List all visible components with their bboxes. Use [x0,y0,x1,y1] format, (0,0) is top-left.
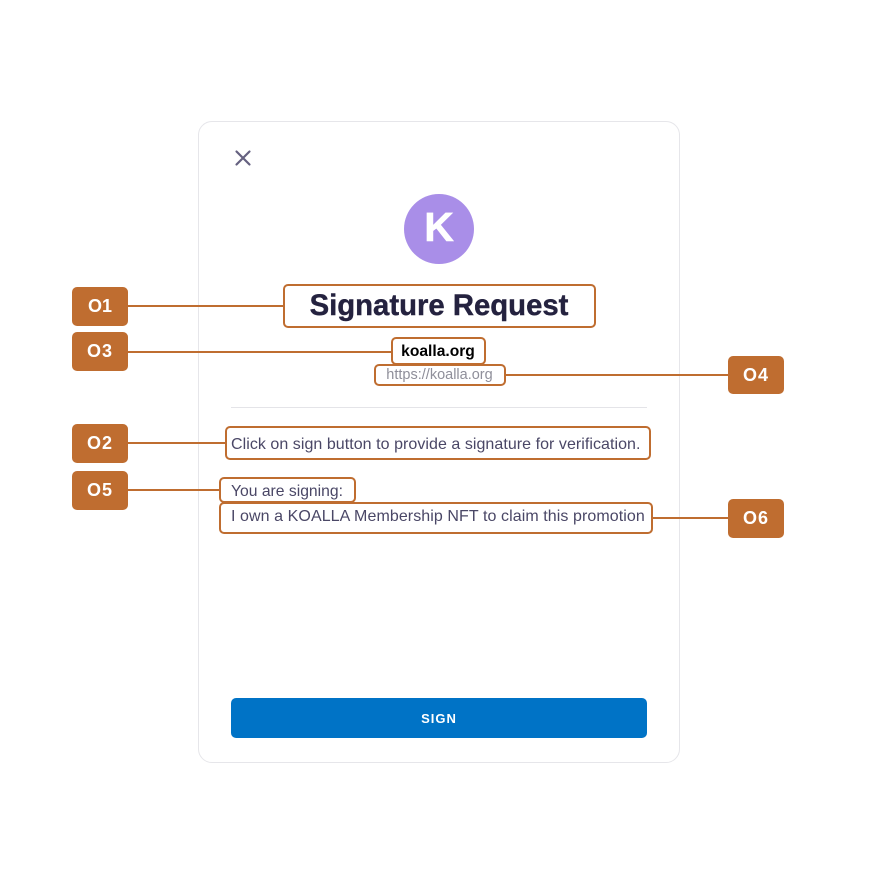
icon: close [235,150,251,166]
icon: K avatar: K [424,204,454,250]
panel: signature dialog [198,121,680,763]
text: You are signing: You are signing: [231,483,343,500]
text: instruction: Click on sign button to provide a signature for verification. [231,436,640,453]
annotation: O6: O6 [743,508,769,528]
text: koalla.org: koalla.org [401,343,475,360]
annotation: O1 [72,284,596,328]
divider [231,407,647,408]
annotation: O6 [219,499,784,538]
text: message: I own a KOALLA Membership NFT to claim this promotion [231,508,645,525]
annotation: O4 [374,356,784,394]
annotation: O1: O1 [88,296,112,316]
annotation: O2: O2 [87,433,113,453]
annotation: O4: O4 [743,365,769,385]
annotation: O5 [72,471,356,510]
button: sign [231,698,647,738]
annotation: O5: O5 [87,480,113,500]
text: https://koalla.org: https://koalla.org [386,367,493,383]
annotation: O3: O3 [87,341,113,361]
heading: Signature Request: Signature Request [310,289,568,322]
button: sign: SIGN [421,711,457,726]
annotation: O2 [72,424,651,463]
annotation: O3 [72,332,486,371]
icon: K avatar [404,194,474,264]
